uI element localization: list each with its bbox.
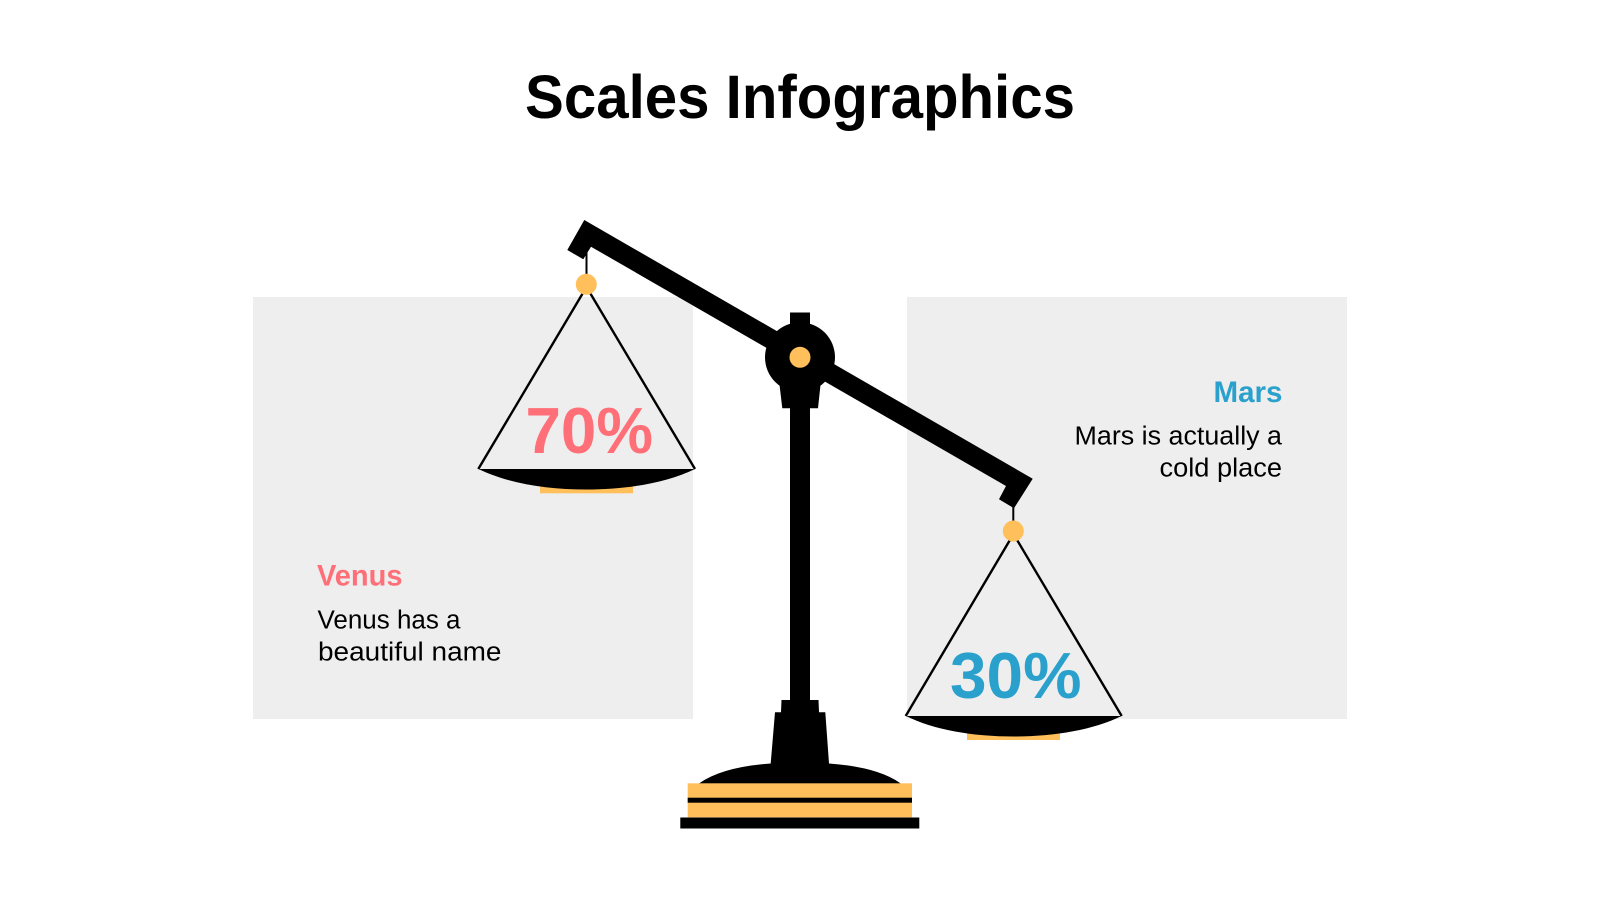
heading: Mars: Mars xyxy=(1214,376,1282,409)
pan cords xyxy=(906,534,1122,716)
hanging string xyxy=(1012,505,1014,525)
description: Venus xyxy=(318,606,502,666)
pan foot xyxy=(540,478,633,493)
title: Scales Infographics xyxy=(525,63,1075,131)
description: Venus: Venus has a xyxy=(318,606,461,634)
pan dish xyxy=(906,716,1122,736)
beam xyxy=(567,220,1033,508)
description: Mars xyxy=(1074,422,1283,482)
panel: Mars background xyxy=(907,297,1347,719)
pole xyxy=(790,312,810,708)
base xyxy=(680,700,919,828)
pan foot xyxy=(967,725,1060,740)
heading: Venus: Venus xyxy=(317,560,402,592)
scale: stand and beam xyxy=(567,220,1033,828)
description: Mars: Mars is actually a xyxy=(1074,422,1283,450)
right pan: Mars 30% xyxy=(906,505,1122,740)
text block: Mars xyxy=(1074,376,1283,482)
value: 30%: 30% xyxy=(950,639,1082,712)
joint xyxy=(576,274,597,295)
description: Venus: beautiful name xyxy=(318,638,502,666)
hub xyxy=(765,322,835,408)
value: 70%: 70% xyxy=(526,394,653,467)
pan dish xyxy=(478,469,695,490)
left pan: Venus 70% xyxy=(478,250,695,493)
description: Mars: cold place xyxy=(1160,454,1282,482)
text block: Venus xyxy=(317,560,502,666)
hanging string xyxy=(586,250,588,280)
pan cords xyxy=(478,287,695,469)
panel: Venus background xyxy=(253,297,693,719)
joint xyxy=(1003,520,1024,542)
